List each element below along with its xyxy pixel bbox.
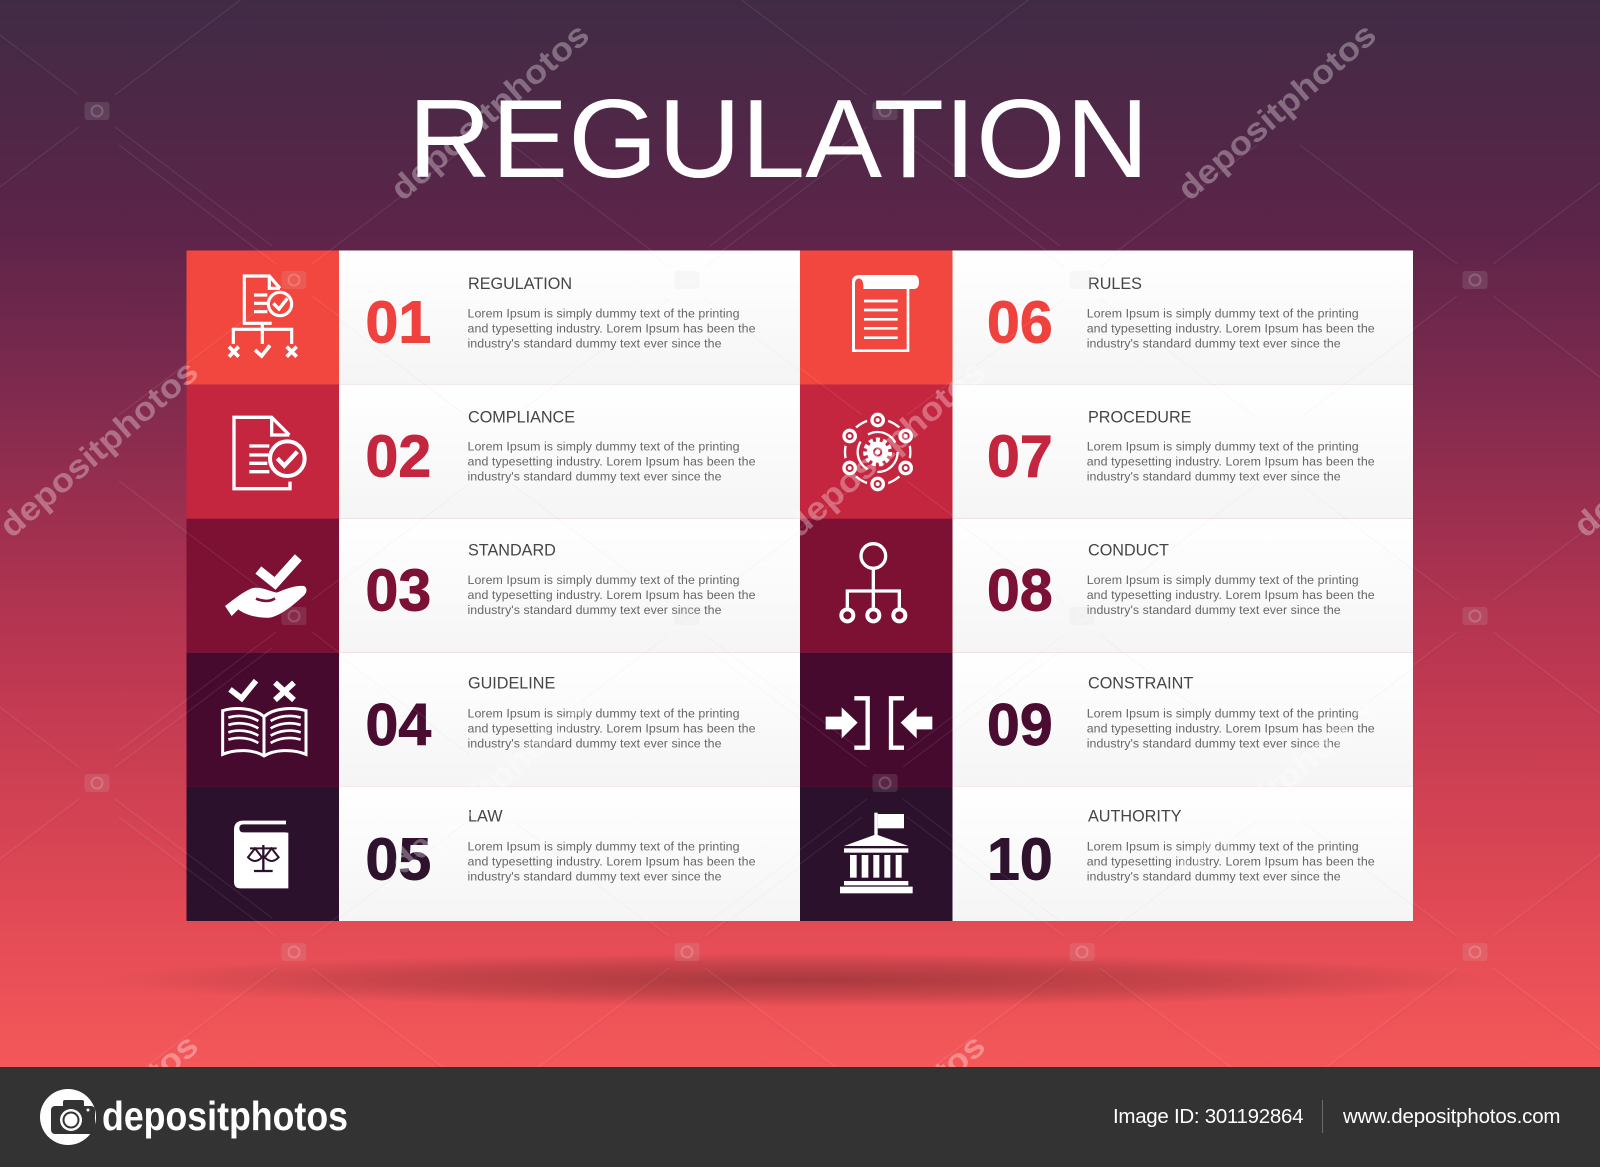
icon: scroll document bbox=[852, 275, 919, 352]
heading: regulation: REGULATION bbox=[468, 275, 572, 293]
watermark text: depositphotos bbox=[1170, 689, 1383, 881]
text block 06: and typesetting industry. Lorem Ipsum has been the bbox=[1087, 321, 1375, 335]
text block 05: industry's standard dummy text ever since the bbox=[468, 870, 722, 884]
panel: right column bbox=[800, 250, 1413, 921]
icon: hand with check bbox=[225, 557, 306, 618]
text block 06 bbox=[1087, 306, 1375, 350]
item 09 constraint bbox=[800, 653, 1413, 787]
website url: www.depositphotos.com bbox=[1342, 1105, 1560, 1128]
number 09: 09 bbox=[987, 692, 1053, 758]
text block 05: Lorem Ipsum is simply dummy text of the printing bbox=[468, 840, 740, 854]
text block 02: and typesetting industry. Lorem Ipsum has been the bbox=[468, 455, 756, 469]
watermark text: depositphotos bbox=[383, 15, 596, 207]
icon: inward arrows with brackets bbox=[826, 698, 932, 748]
item 04 guideline bbox=[186, 653, 800, 787]
icon: hierarchy bbox=[841, 544, 905, 621]
text block 01: Lorem Ipsum is simply dummy text of the printing bbox=[468, 306, 740, 320]
item 08 conduct bbox=[800, 519, 1413, 653]
text block 04: and typesetting industry. Lorem Ipsum has been the bbox=[468, 721, 756, 735]
icon: open book with marks bbox=[223, 681, 306, 756]
heading: standard: STANDARD bbox=[468, 541, 556, 559]
heading: law: LAW bbox=[468, 808, 503, 826]
text block 01: industry's standard dummy text ever since the bbox=[468, 336, 722, 350]
item 02 compliance bbox=[186, 385, 800, 519]
text block 08: industry's standard dummy text ever since the bbox=[1087, 603, 1341, 617]
heading: authority: AUTHORITY bbox=[1088, 808, 1182, 826]
number 10: 10 bbox=[987, 826, 1053, 892]
text block 05 bbox=[468, 840, 756, 884]
text block 08 bbox=[1087, 573, 1375, 617]
heading: conduct: CONDUCT bbox=[1088, 541, 1169, 559]
number 05: 05 bbox=[366, 826, 431, 892]
text block 01: and typesetting industry. Lorem Ipsum has been the bbox=[468, 321, 756, 335]
icon: document hierarchy bbox=[229, 276, 297, 357]
footer bar bbox=[0, 1067, 1600, 1167]
icon: document check bbox=[234, 417, 305, 489]
icon: law book bbox=[234, 821, 288, 888]
text block 07: Lorem Ipsum is simply dummy text of the printing bbox=[1087, 440, 1359, 454]
heading: constraint: CONSTRAINT bbox=[1088, 674, 1193, 692]
heading: procedure: PROCEDURE bbox=[1088, 408, 1192, 426]
watermark text: depositphotos bbox=[383, 689, 596, 881]
text block 03: Lorem Ipsum is simply dummy text of the printing bbox=[468, 573, 740, 587]
text block 10 bbox=[1087, 840, 1375, 884]
image id: Image ID: 301192864 bbox=[1113, 1105, 1304, 1128]
item 06 rules bbox=[800, 250, 1413, 385]
text block 08: Lorem Ipsum is simply dummy text of the printing bbox=[1087, 573, 1359, 587]
icon: process gear network bbox=[839, 409, 916, 495]
heading: rules: RULES bbox=[1088, 275, 1142, 293]
text block 10: Lorem Ipsum is simply dummy text of the printing bbox=[1087, 840, 1359, 854]
icon: government building with flag bbox=[840, 813, 913, 893]
heading: compliance: COMPLIANCE bbox=[468, 408, 575, 426]
item 05 law bbox=[186, 787, 800, 921]
logo icon: camera badge bbox=[40, 1089, 96, 1145]
number 02: 02 bbox=[366, 423, 431, 489]
watermark text: depositphotos bbox=[779, 352, 992, 544]
text block 03: industry's standard dummy text ever since the bbox=[468, 603, 722, 617]
text block 09 bbox=[1087, 706, 1375, 750]
text block 08: and typesetting industry. Lorem Ipsum has been the bbox=[1087, 588, 1375, 602]
text block 02: Lorem Ipsum is simply dummy text of the printing bbox=[468, 440, 740, 454]
text block 09: Lorem Ipsum is simply dummy text of the printing bbox=[1087, 706, 1359, 720]
text block 04: industry's standard dummy text ever since the bbox=[468, 736, 722, 750]
item 07 procedure bbox=[800, 385, 1413, 519]
text block 02: industry's standard dummy text ever since the bbox=[468, 470, 722, 484]
text block 03: and typesetting industry. Lorem Ipsum has been the bbox=[468, 588, 756, 602]
logo wordmark: depositphotos bbox=[102, 1093, 348, 1139]
number 06: 06 bbox=[987, 290, 1053, 356]
text block 06: industry's standard dummy text ever since the bbox=[1087, 336, 1341, 350]
text block 09: and typesetting industry. Lorem Ipsum has been the bbox=[1087, 721, 1375, 735]
text block 04 bbox=[468, 706, 756, 750]
heading: guideline: GUIDELINE bbox=[468, 674, 555, 692]
panel shadow bbox=[100, 953, 1500, 1007]
panel: left column bbox=[186, 250, 800, 921]
title: REGULATION bbox=[408, 77, 1149, 201]
item 10 authority bbox=[800, 787, 1413, 921]
text block 10: industry's standard dummy text ever since the bbox=[1087, 870, 1341, 884]
text block 07 bbox=[1087, 440, 1375, 484]
number 08: 08 bbox=[987, 558, 1053, 624]
number 03: 03 bbox=[366, 558, 431, 624]
text block 07: industry's standard dummy text ever since the bbox=[1087, 470, 1341, 484]
item 01 regulation bbox=[186, 250, 800, 385]
watermark text: depositphotos bbox=[1170, 15, 1383, 207]
text block 06: Lorem Ipsum is simply dummy text of the printing bbox=[1087, 306, 1359, 320]
number 01: 01 bbox=[366, 290, 431, 356]
text block 03 bbox=[468, 573, 756, 617]
text block 10: and typesetting industry. Lorem Ipsum has been the bbox=[1087, 855, 1375, 869]
number 04: 04 bbox=[366, 692, 431, 758]
text block 09: industry's standard dummy text ever since the bbox=[1087, 736, 1341, 750]
text block 05: and typesetting industry. Lorem Ipsum has been the bbox=[468, 855, 756, 869]
text block 04: Lorem Ipsum is simply dummy text of the printing bbox=[468, 706, 740, 720]
number 07: 07 bbox=[987, 423, 1053, 489]
item 03 standard bbox=[186, 519, 800, 653]
text block 02 bbox=[468, 440, 756, 484]
text block 01 bbox=[468, 306, 756, 350]
text block 07: and typesetting industry. Lorem Ipsum has been the bbox=[1087, 455, 1375, 469]
